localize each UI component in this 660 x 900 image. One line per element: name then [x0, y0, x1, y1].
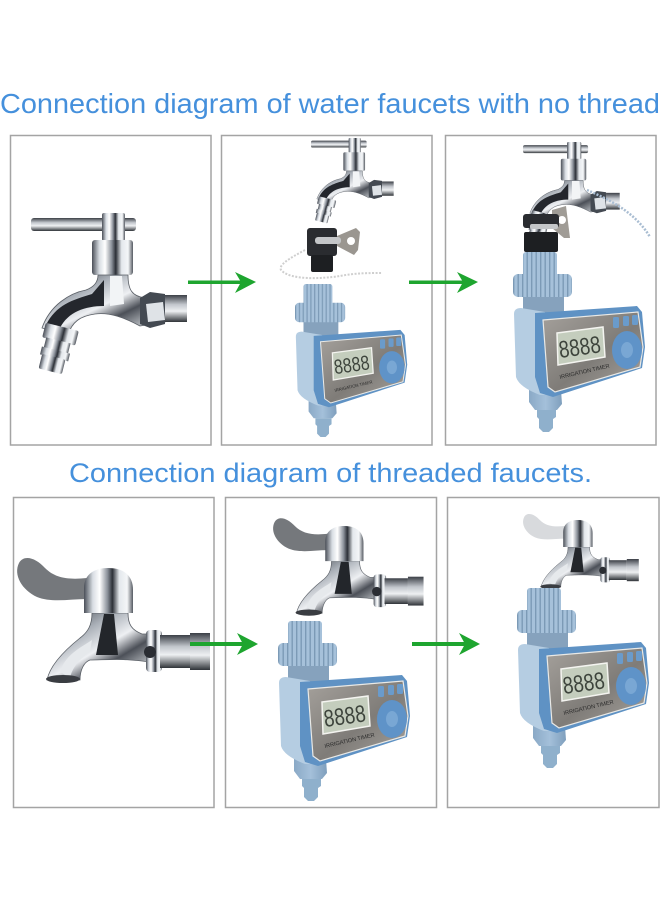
icon: irrigation timer: IRRIGATION TIMER: [334, 379, 373, 393]
arrow: top second: [409, 272, 478, 293]
icon: chrome faucet with key handle: [31, 213, 187, 376]
panel: assembled threaded faucet: [448, 498, 659, 808]
arrow: top first: [188, 272, 256, 293]
panel: assembled unthreaded faucet: [446, 136, 656, 445]
title: no-thread faucets: Connection diagram of water faucets with no thread: [0, 88, 660, 119]
icon: irrigation timer: [513, 252, 645, 432]
arrow: bottom second: [412, 633, 480, 655]
panel: faucet with adapter above timer: [222, 136, 432, 445]
icon: bead chain: [281, 250, 382, 278]
icon: adapter clamp: [523, 206, 570, 252]
icon: chrome faucet with lever handle: [17, 558, 210, 683]
icon: irrigation timer: 8888: [557, 331, 602, 364]
icon: bead chain: [587, 190, 650, 237]
arrow: bottom first: [190, 633, 258, 655]
icon: irrigation timer: [278, 621, 410, 801]
icon: irrigation timer: 8888: [322, 700, 367, 733]
panel: unthreaded faucet: [10, 136, 211, 445]
panel: threaded faucet: [14, 498, 214, 808]
icon: irrigation timer: 8888: [333, 352, 371, 379]
title: threaded faucets: Connection diagram of threaded faucets.: [69, 458, 592, 488]
icon: irrigation timer: 8888: [561, 667, 606, 700]
icon: irrigation timer: IRRIGATION TIMER: [563, 700, 614, 717]
icon: adapter clamp: [307, 228, 360, 272]
icon: irrigation timer: IRRIGATION TIMER: [324, 733, 375, 750]
icon: irrigation timer: [295, 284, 407, 437]
icon: irrigation timer: [517, 588, 649, 768]
panel: threaded faucet above timer: [226, 498, 436, 808]
icon: faucet: [523, 142, 620, 243]
icon: irrigation timer: IRRIGATION TIMER: [559, 364, 610, 381]
icon: small faucet: [311, 138, 394, 224]
icon: lever faucet: [523, 514, 639, 589]
icon: small lever faucet: [273, 518, 424, 616]
